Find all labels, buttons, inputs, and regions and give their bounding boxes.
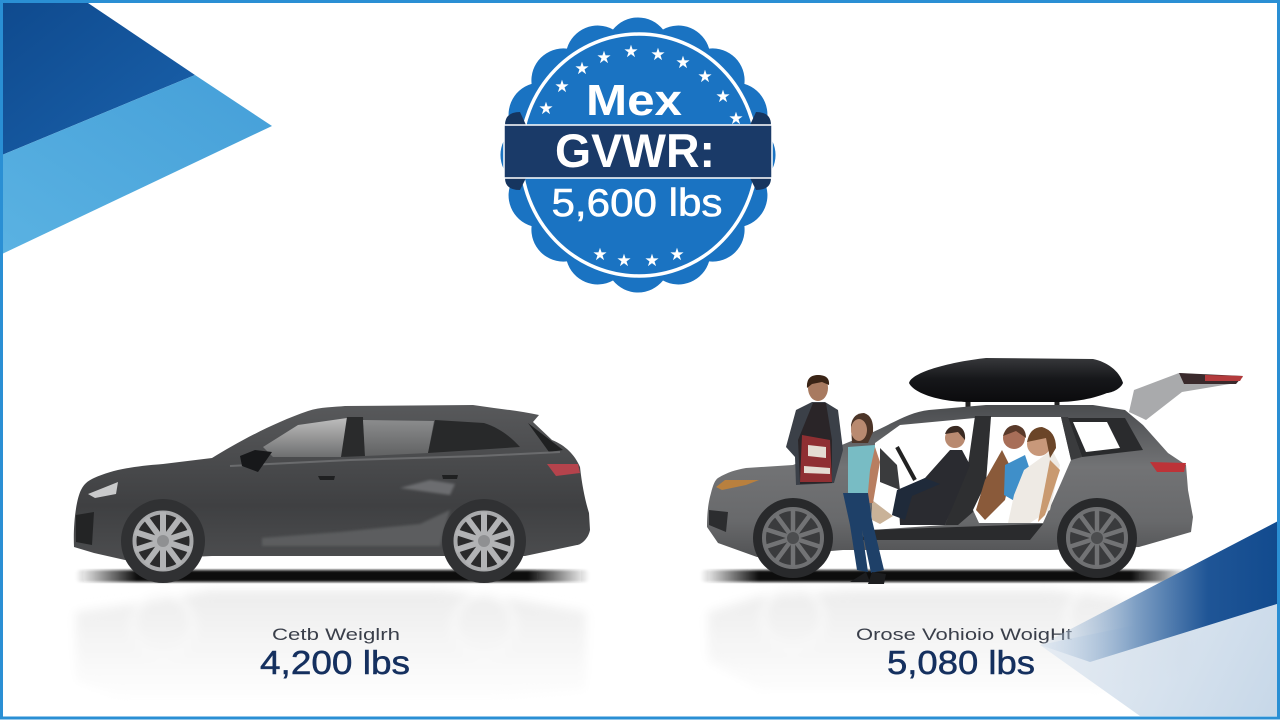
back window (428, 420, 520, 453)
ground shadow (75, 570, 590, 582)
centre pillar (945, 416, 991, 525)
ground shadow (700, 570, 1190, 582)
banner (504, 125, 772, 178)
stars: ★ (538, 99, 554, 118)
ribbon tails (505, 112, 771, 190)
bottom-right corner shapes (1040, 520, 1280, 716)
stars: ★ (728, 109, 744, 128)
badge value: 5,600 lbs (552, 182, 722, 225)
stars: ★ (675, 53, 691, 72)
value: 4,200 lbs (260, 644, 410, 681)
woman (843, 413, 886, 584)
curb weight label (260, 625, 410, 681)
front window (263, 418, 347, 457)
scalloped seal edge (500, 17, 776, 293)
stars: ★ (592, 245, 608, 264)
front wheel (753, 498, 833, 578)
stars: ★ (623, 42, 639, 61)
rear window frame (1068, 418, 1143, 457)
headlight (88, 482, 118, 498)
right car reflection (708, 588, 1190, 690)
rear wheel (1057, 498, 1137, 578)
body highlight rear (400, 480, 455, 495)
lower body highlight (262, 510, 450, 546)
stars: ★ (596, 48, 612, 67)
stars: ★ (715, 87, 731, 106)
label: Orose Vohioio WoigHt (856, 625, 1072, 644)
front wheel (121, 499, 205, 583)
taillight (547, 464, 580, 476)
grille (76, 512, 94, 545)
front seat (880, 448, 900, 490)
panel: gross vehicle weight car (700, 358, 1243, 584)
stars: ★ (644, 251, 660, 270)
rear window (1073, 422, 1120, 452)
value: 5,080 lbs (887, 644, 1035, 681)
shoulder line (230, 452, 560, 466)
white inner ring (521, 34, 757, 276)
rear wheel (442, 499, 526, 583)
front door opening (871, 418, 975, 530)
max GVWR badge (500, 17, 776, 293)
panel: curb weight car (74, 405, 590, 583)
rear door window (363, 420, 434, 456)
driver (872, 426, 970, 525)
mirror (240, 450, 272, 472)
stars: ★ (697, 67, 713, 86)
rear quarter window (528, 423, 563, 452)
rear passengers (976, 425, 1060, 523)
taillight (1150, 462, 1186, 472)
rear door opening (973, 417, 1071, 523)
stars: ★ (669, 245, 685, 264)
man (786, 375, 843, 485)
stars: ★ (554, 77, 570, 96)
stars: ★ (650, 45, 666, 64)
rocker shadow (860, 524, 1043, 540)
door handles (318, 475, 458, 480)
car body (707, 405, 1193, 557)
badge heading: GVWR: GVWR: (555, 124, 715, 177)
steering wheel (897, 447, 915, 480)
roof cargo box (909, 358, 1123, 402)
open tailgate (1129, 373, 1243, 420)
label: Cetb Weiglrh (272, 625, 400, 644)
door pillar (341, 417, 365, 457)
stars: ★ (616, 251, 632, 270)
top-left corner triangles (2, 3, 272, 254)
stars (538, 42, 744, 270)
gross vehicle weight label (856, 625, 1072, 681)
left car reflection (76, 590, 586, 698)
front bumper (709, 510, 728, 532)
stars: ★ (574, 59, 590, 78)
car body (74, 405, 590, 560)
badge heading: Max: Mex (586, 76, 683, 125)
headlight (716, 480, 759, 490)
roof rack bars (968, 402, 1057, 407)
rear window pillar (1061, 417, 1082, 460)
